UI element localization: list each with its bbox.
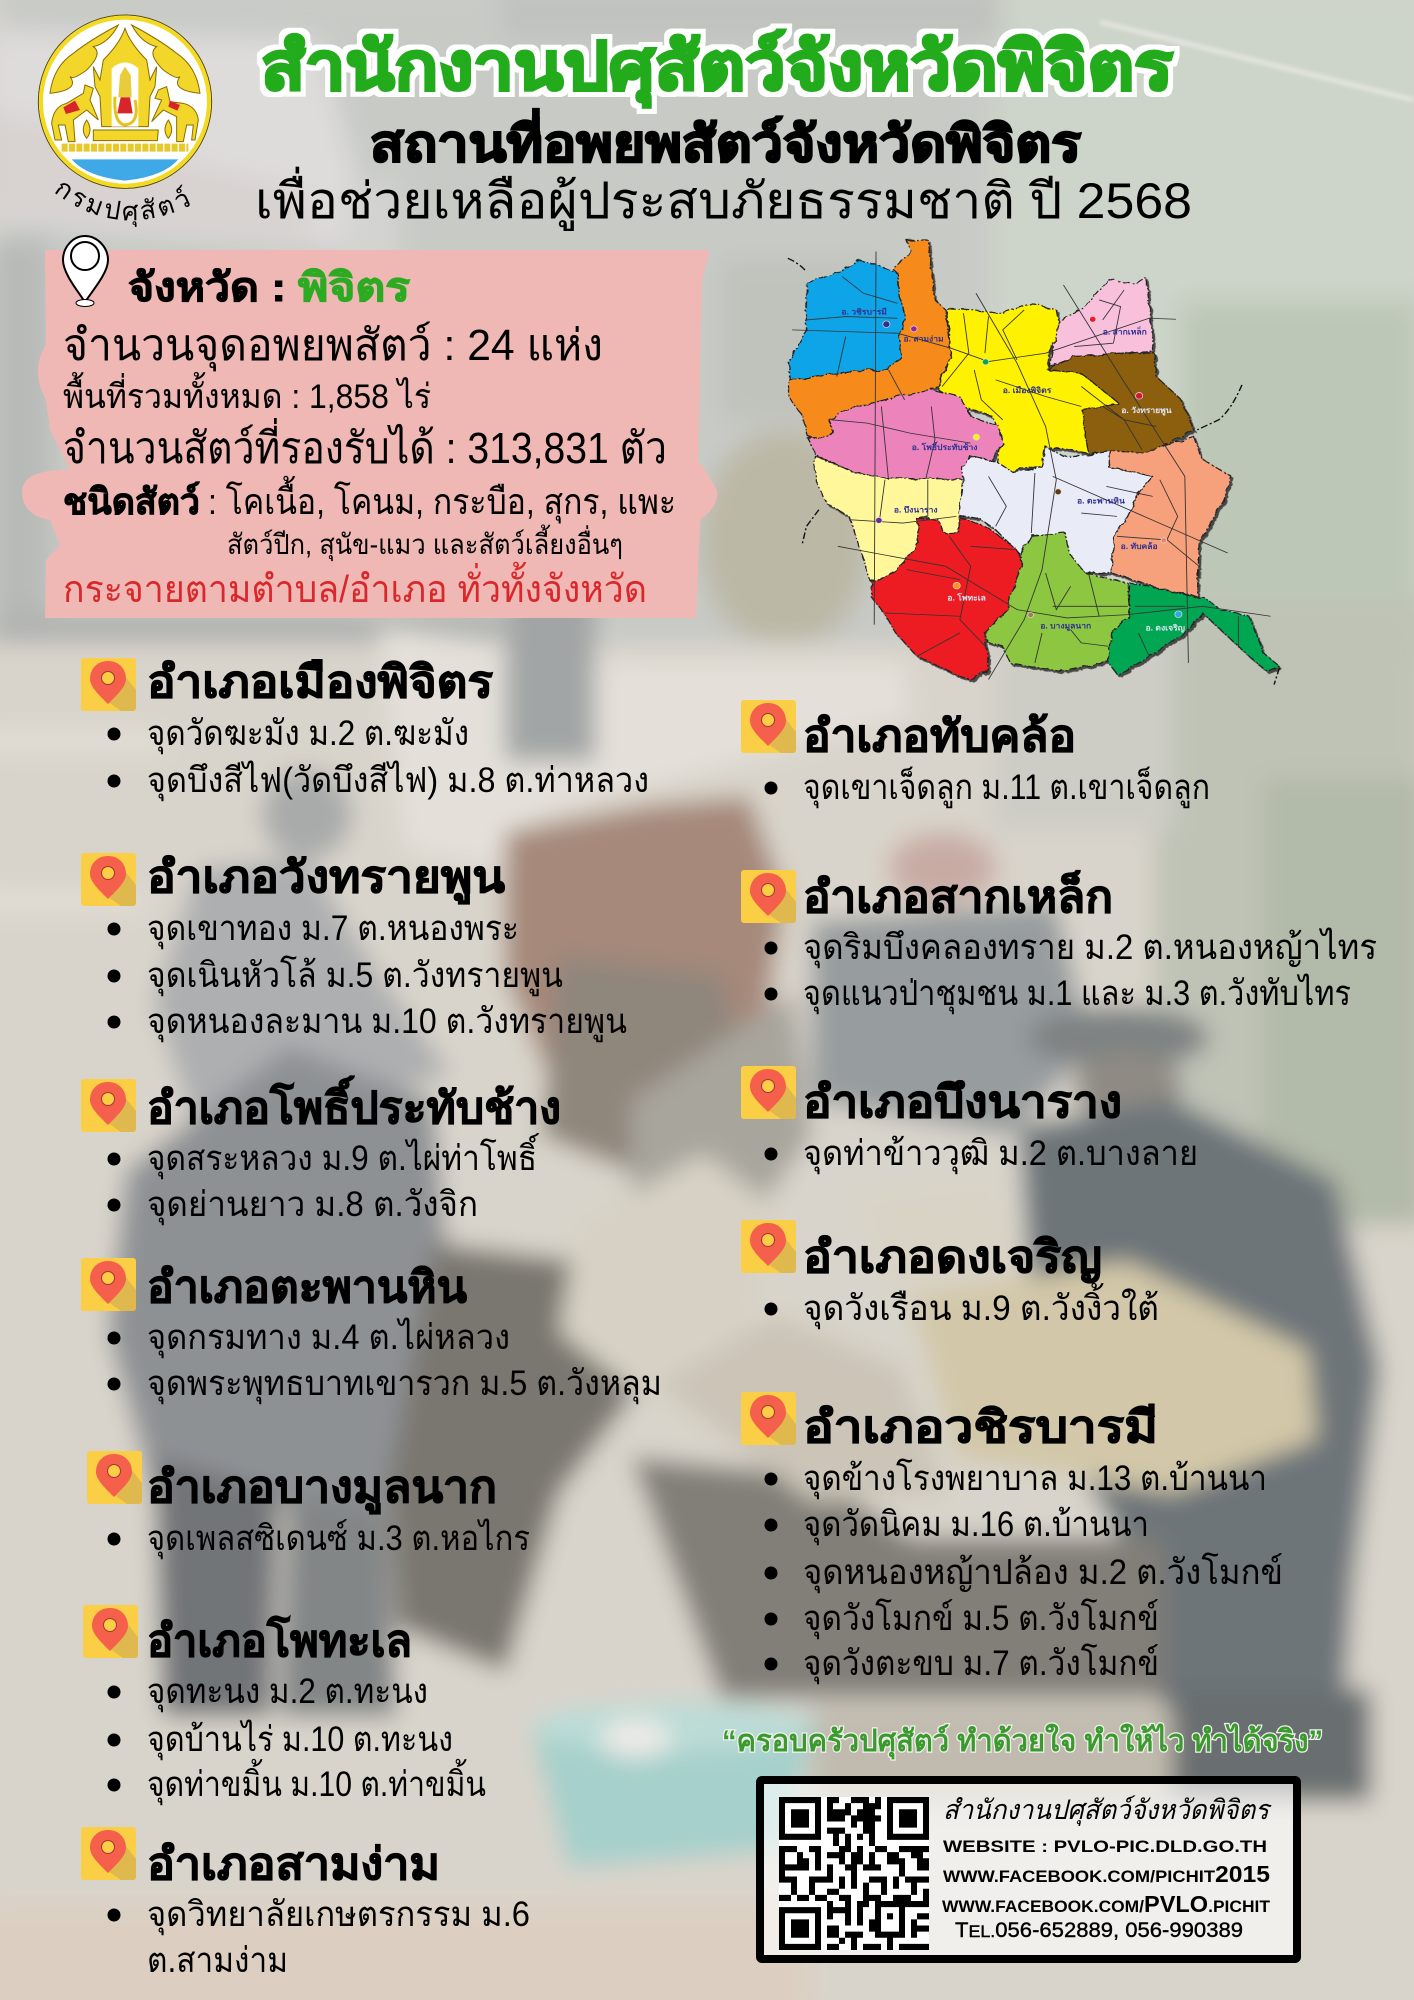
- province label: จังหวัด :: [128, 266, 286, 310]
- slogan: “ครอบครัวปศุสัตว์ ทำด้วยใจ ทำให้ไว ทำได้จริง”: [722, 1723, 1323, 1760]
- map district labels: อ. ตะพานหิน: [1077, 497, 1125, 506]
- district: Mueang Phichit: จุดบึงสีไฟ(วัดบึงสีไฟ) ม.8 ต.ท่าหลวง: [147, 760, 649, 801]
- district: Dong Charoen: อำเภอดงเจริญ: [803, 1233, 1102, 1283]
- panel: province summary: [22, 236, 717, 618]
- district: Sam Ngam: ต.สามง่าม: [147, 1941, 288, 1980]
- district: Wachirabarami: จุดข้างโรงพยาบาล ม.13 ต.บ้านนา: [803, 1458, 1267, 1499]
- district: Pho Prathap Chang: จุดสระหลวง ม.9 ต.ไผ่ท่าโพธิ์: [147, 1133, 540, 1179]
- facebook 2: WWW.FACEBOOK.COM/PVLO.PICHIT: [942, 1891, 1271, 1917]
- map district labels: อ. สากเหล็ก: [1103, 326, 1147, 336]
- map district labels: อ. โพธิ์ประทับช้าง: [912, 440, 978, 452]
- map district labels: อ. สามง่าม: [904, 335, 944, 343]
- district: Sak Lek: จุดริมบึงคลองทราย ม.2 ต.หนองหญ้าไทร: [803, 927, 1377, 968]
- map district labels: อ. วชิรบารมี: [841, 307, 887, 317]
- district: Sam Ngam: จุดวิทยาลัยเกษตรกรรม ม.6: [147, 1895, 530, 1935]
- stat: shelter count: จำนวนจุดอพยพสัตว์ : 24 แห่ง: [63, 321, 603, 372]
- district: Pho Prathap Chang: อำเภอโพธิ์ประทับช้าง: [147, 1075, 561, 1133]
- animal types list: : โคเนื้อ, โคนม, กระบือ, สุกร, แพะ: [208, 475, 676, 524]
- district: Taphan Hin: อำเภอตะพานหิน: [147, 1263, 467, 1312]
- district: Bueng Na Rang: [741, 1066, 1198, 1174]
- district: Wachirabarami: จุดหนองหญ้าปล้อง ม.2 ต.วังโมกข์: [803, 1552, 1283, 1593]
- district: Wang Sai Phun: จุดเขาทอง ม.7 ต.หนองพระ: [147, 909, 519, 949]
- district: Bang Mun Nak: อำเภอบางมูลนาก: [147, 1463, 497, 1514]
- district: Wachirabarami: จุดวัดนิคม ม.16 ต.บ้านนา: [803, 1505, 1149, 1545]
- district: Bueng Na Rang: จุดท่าข้าววุฒิ ม.2 ต.บางลาย: [803, 1134, 1198, 1174]
- animal types list continued: สัตว์ปีก, สุนัข-แมว และสัตว์เลี้ยงอื่นๆ: [227, 524, 623, 562]
- district: Wang Sai Phun: [81, 853, 627, 1042]
- district: Bueng Na Rang: อำเภอบึงนาราง: [803, 1078, 1122, 1127]
- office name script: สำนักงานปศุสัตว์จังหวัดพิจิตร: [943, 1795, 1272, 1827]
- district: Mueang Phichit: จุดวัดฆะมัง ม.2 ต.ฆะมัง: [147, 714, 469, 754]
- map district labels: อ. บางมูลนาก: [1040, 622, 1091, 631]
- map district labels: อ. เมืองพิจิตร: [1003, 385, 1052, 395]
- district: Sam Ngam: อำเภอสามง่าม: [147, 1840, 440, 1889]
- website: WEBSITE : PVLO-PIC.DLD.GO.TH: [943, 1837, 1267, 1856]
- subtitle: animal shelters: สถานที่อพยพสัตว์จังหวัดพิจิตร: [370, 109, 1081, 172]
- district: Pho Thale: [83, 1605, 486, 1805]
- province name: พิจิตร: [298, 266, 411, 310]
- district: Wang Sai Phun: จุดเนินหัวโล้ ม.5 ต.วังทรายพูน: [147, 955, 563, 996]
- district: Pho Thale: จุดบ้านไร่ ม.10 ต.ทะนง: [147, 1719, 453, 1760]
- map district labels: อ. ทับคล้อ: [1121, 541, 1158, 551]
- district: Pho Thale: จุดท่าขมิ้น ม.10 ต.ท่าขมิ้น: [147, 1758, 486, 1805]
- district: Wang Sai Phun: จุดหนองละมาน ม.10 ต.วังทรายพูน: [147, 1002, 627, 1042]
- district: Thap Khlo: [741, 700, 1210, 808]
- map district labels: อ. โพทะเล: [947, 593, 986, 602]
- logo: Department of Livestock Development: [38, 14, 212, 227]
- district: Mueang Phichit: [81, 658, 649, 801]
- district: Wachirabarami: จุดวังโมกข์ ม.5 ต.วังโมกข์: [803, 1598, 1159, 1639]
- map roads and subdistrict lines: [792, 252, 1271, 680]
- district: Thap Khlo: จุดเขาเจ็ดลูก ม.11 ต.เขาเจ็ดลูก: [803, 766, 1210, 808]
- map outer boundary tails: [788, 258, 1279, 685]
- district: Thap Khlo: อำเภอทับคล้อ: [803, 712, 1076, 761]
- district: Bang Mun Nak: [87, 1451, 530, 1559]
- district: Sak Lek: จุดแนวป่าชุมชน ม.1 และ ม.3 ต.วังทับไทร: [803, 973, 1351, 1014]
- title: office name: สำนักงานปศุสัตว์จังหวัดพิจิตร: [261, 29, 1173, 108]
- district: Pho Thale: อำเภอโพทะเล: [147, 1614, 412, 1666]
- district: Wachirabarami: จุดวังตะขบ ม.7 ต.วังโมกข์: [803, 1643, 1159, 1684]
- district: Bang Mun Nak: จุดเพลสซิเดนซ์ ม.3 ต.หอไกร: [147, 1518, 530, 1559]
- district: Pho Prathap Chang: [81, 1075, 561, 1225]
- stat: total area: พื้นที่รวมทั้งหมด : 1,858 ไร่: [63, 372, 431, 416]
- telephone: TEL.056-652889, 056-990389: [955, 1919, 1243, 1942]
- logo caption: กรมปศุสัตว์: กรมปศุสัตว์: [55, 183, 190, 227]
- map district labels: [841, 307, 1185, 633]
- distribution note: กระจายตามตำบล/อำเภอ ทั่วทั้งจังหวัด: [63, 561, 647, 611]
- facebook 1: WWW.FACEBOOK.COM/PICHIT 2015: [943, 1861, 1270, 1887]
- district: Taphan Hin: จุดกรมทาง ม.4 ต.ไผ่หลวง: [147, 1317, 510, 1358]
- subtitle: purpose: เพื่อช่วยเหลือผู้ประสบภัยธรรมชาติ ปี 2568: [255, 167, 1192, 231]
- district: Pho Prathap Chang: จุดย่านยาว ม.8 ต.วังจิก: [147, 1185, 478, 1225]
- district: Wachirabarami: อำเภอวชิรบารมี: [803, 1403, 1158, 1452]
- district: Wang Sai Phun: อำเภอวังทรายพูน: [147, 853, 505, 904]
- stat: animal capacity: จำนวนสัตว์ที่รองรับได้ : 313,831 ตัว: [63, 417, 667, 473]
- district: Taphan Hin: จุดพระพุทธบาทเขารวก ม.5 ต.วังหลุม: [147, 1364, 662, 1404]
- QR code: [779, 1797, 929, 1950]
- map: Phichit districts: [788, 240, 1279, 685]
- district: Sak Lek: อำเภอสากเหล็ก: [803, 870, 1113, 922]
- map district dots: [876, 316, 1182, 618]
- district: Pho Thale: จุดทะนง ม.2 ต.ทะนง: [147, 1672, 428, 1712]
- district: Mueang Phichit: อำเภอเมืองพิจิตร: [147, 658, 493, 707]
- animal types label: ชนิดสัตว์: [63, 481, 200, 522]
- icon: white map pin: [63, 236, 108, 306]
- map district labels: อ. ดงเจริญ: [1146, 624, 1185, 633]
- district: Dong Charoen: [741, 1220, 1159, 1329]
- district: Dong Charoen: จุดวังเรือน ม.9 ต.วังงิ้วใต้: [803, 1282, 1159, 1329]
- district: Sak Lek: [741, 870, 1377, 1014]
- district: Taphan Hin: [81, 1258, 662, 1404]
- map district labels: อ. วังทรายพูน: [1121, 406, 1172, 416]
- district: Sam Ngam: [81, 1827, 530, 1980]
- map district labels: อ. บึงนาราง: [894, 505, 938, 514]
- contact box: [760, 1780, 1297, 1959]
- district: Wachirabarami: [741, 1392, 1283, 1684]
